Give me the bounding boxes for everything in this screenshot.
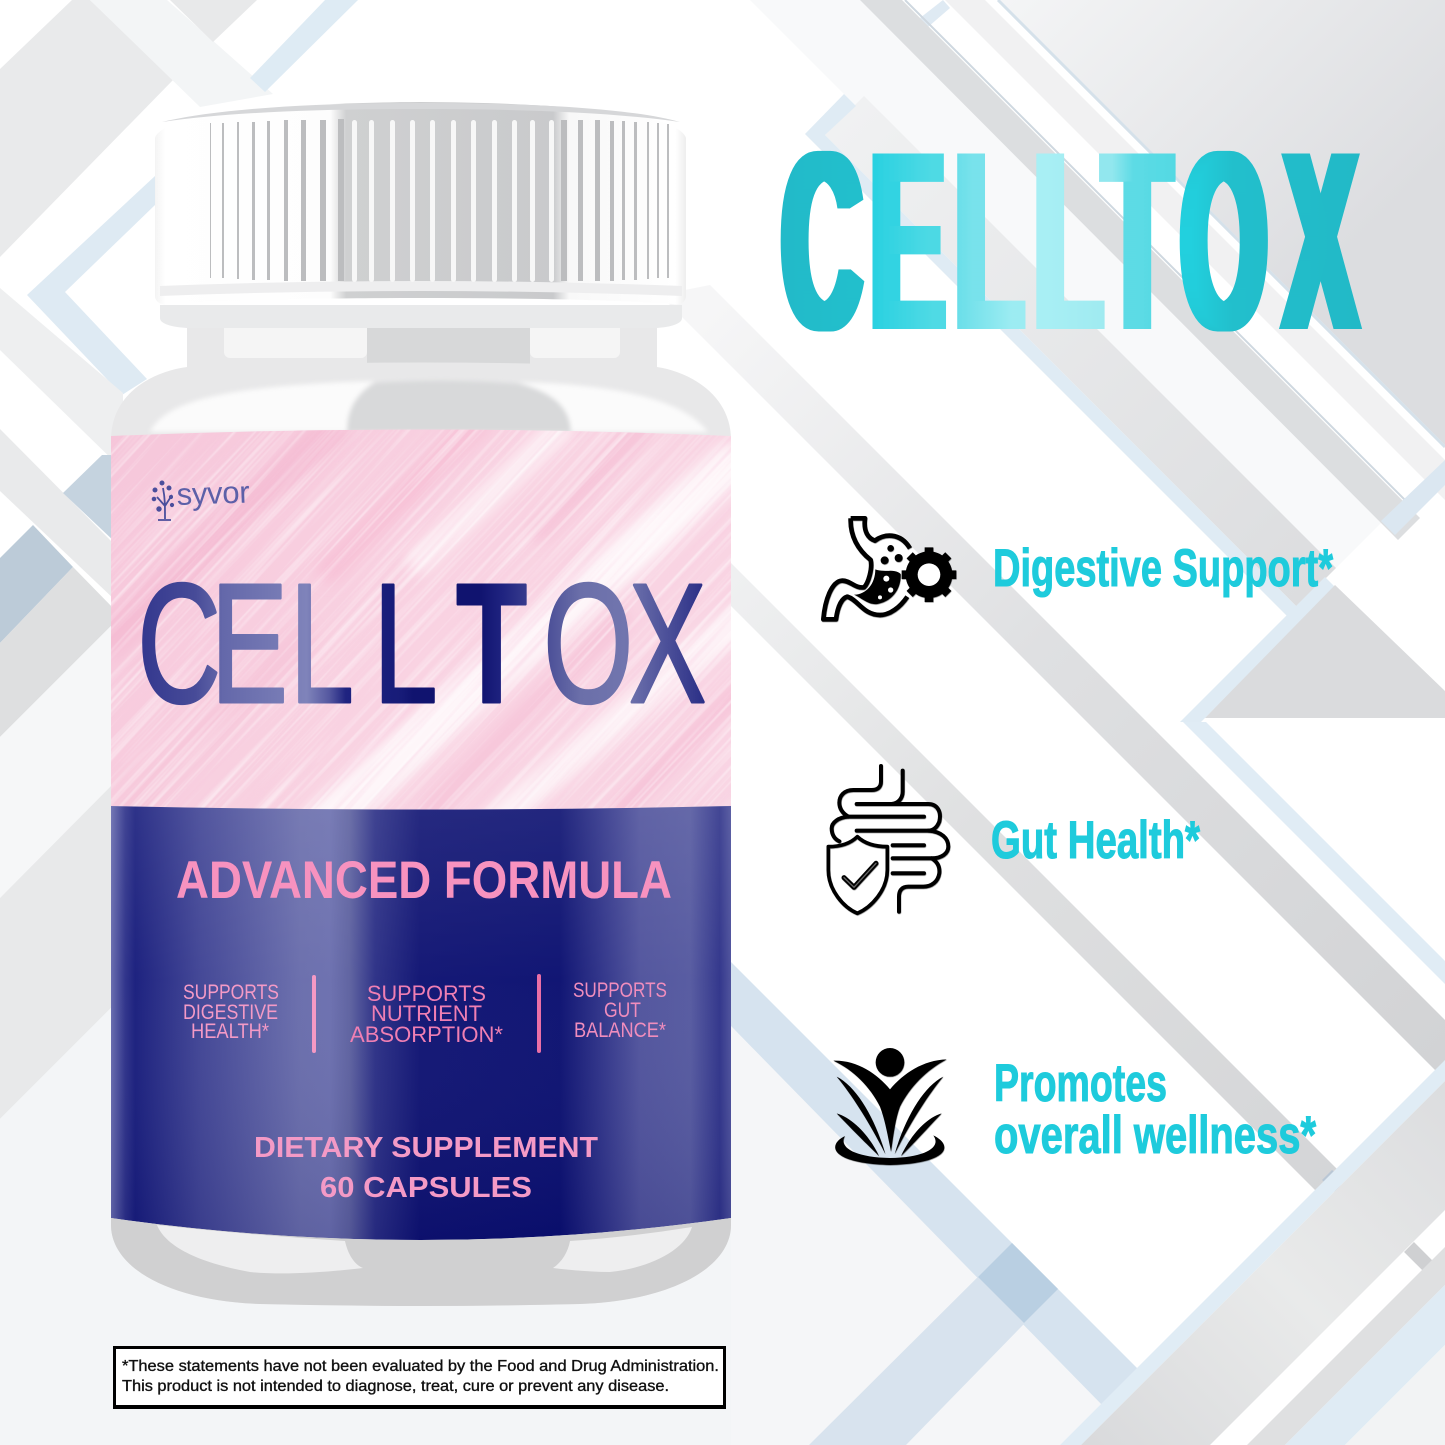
title: CELLTOX: CELLTOX	[782, 98, 1357, 384]
label benefit column 1: DIGESTIVE	[183, 1001, 278, 1024]
brand logo: syvor	[152, 474, 250, 520]
label footer: dietary supplement: DIETARY SUPPLEMENT	[254, 1132, 598, 1164]
label benefit column 2: ABSORPTION*	[350, 1022, 503, 1047]
benefit row: gut health	[828, 766, 1200, 913]
label divider 1	[312, 975, 316, 1053]
benefit row: overall wellness	[833, 1048, 1316, 1165]
label footer: dietary supplement: 60 CAPSULES	[320, 1172, 532, 1204]
icon: tree	[152, 481, 174, 520]
label benefit column 2	[350, 981, 503, 1047]
benefit row: digestive support	[823, 518, 1333, 619]
label benefit column 3: BALANCE*	[574, 1019, 666, 1042]
cap collar	[160, 305, 682, 328]
bottle cap	[155, 102, 686, 305]
label benefit column 3	[573, 979, 667, 1042]
label footer: dietary supplement	[254, 1132, 598, 1204]
label benefit column 2: SUPPORTS	[367, 981, 486, 1006]
disclaimer box: This product is not intended to diagnose, treat, cure or prevent any disease.	[122, 1378, 669, 1395]
label divider 2	[537, 974, 541, 1053]
disclaimer box: *These statements have not been evaluated by the Food and Drug Administration.	[122, 1358, 719, 1375]
label: promotes overall wellness	[994, 1054, 1316, 1165]
navy label panel	[111, 806, 731, 1240]
label: gut health: Gut Health*	[991, 811, 1200, 870]
pink label panel	[111, 430, 731, 810]
label: promotes overall wellness: Promotes	[994, 1054, 1167, 1113]
icon: intestine with shield	[828, 766, 948, 913]
label heading: advanced formula: ADVANCED FORMULA	[176, 851, 672, 910]
gear	[912, 557, 946, 592]
shoulder highlights	[150, 381, 708, 432]
left side bands	[0, 0, 173, 257]
label benefit column 1: SUPPORTS	[183, 981, 279, 1004]
label benefit column 3: GUT	[604, 999, 641, 1022]
label: promotes overall wellness: overall wellness*	[994, 1106, 1316, 1165]
label benefit column 2: NUTRIENT	[371, 1001, 482, 1026]
label benefit column 3: SUPPORTS	[573, 979, 667, 1002]
label benefit column 1: HEALTH*	[191, 1020, 269, 1043]
bottle base	[111, 1218, 731, 1306]
brand name: syvor	[176, 474, 250, 512]
label benefit column 1	[183, 981, 279, 1043]
icon: stomach with gear	[823, 518, 956, 619]
product bottle	[111, 102, 731, 1306]
cap ribs	[210, 119, 669, 281]
disclaimer box	[113, 1348, 726, 1409]
bottle body	[111, 362, 731, 1306]
right side bands	[750, 0, 1382, 577]
icon: person with leaves	[833, 1048, 947, 1165]
bottle neck	[187, 316, 657, 378]
product name on label: CELLTOX	[137, 548, 706, 738]
